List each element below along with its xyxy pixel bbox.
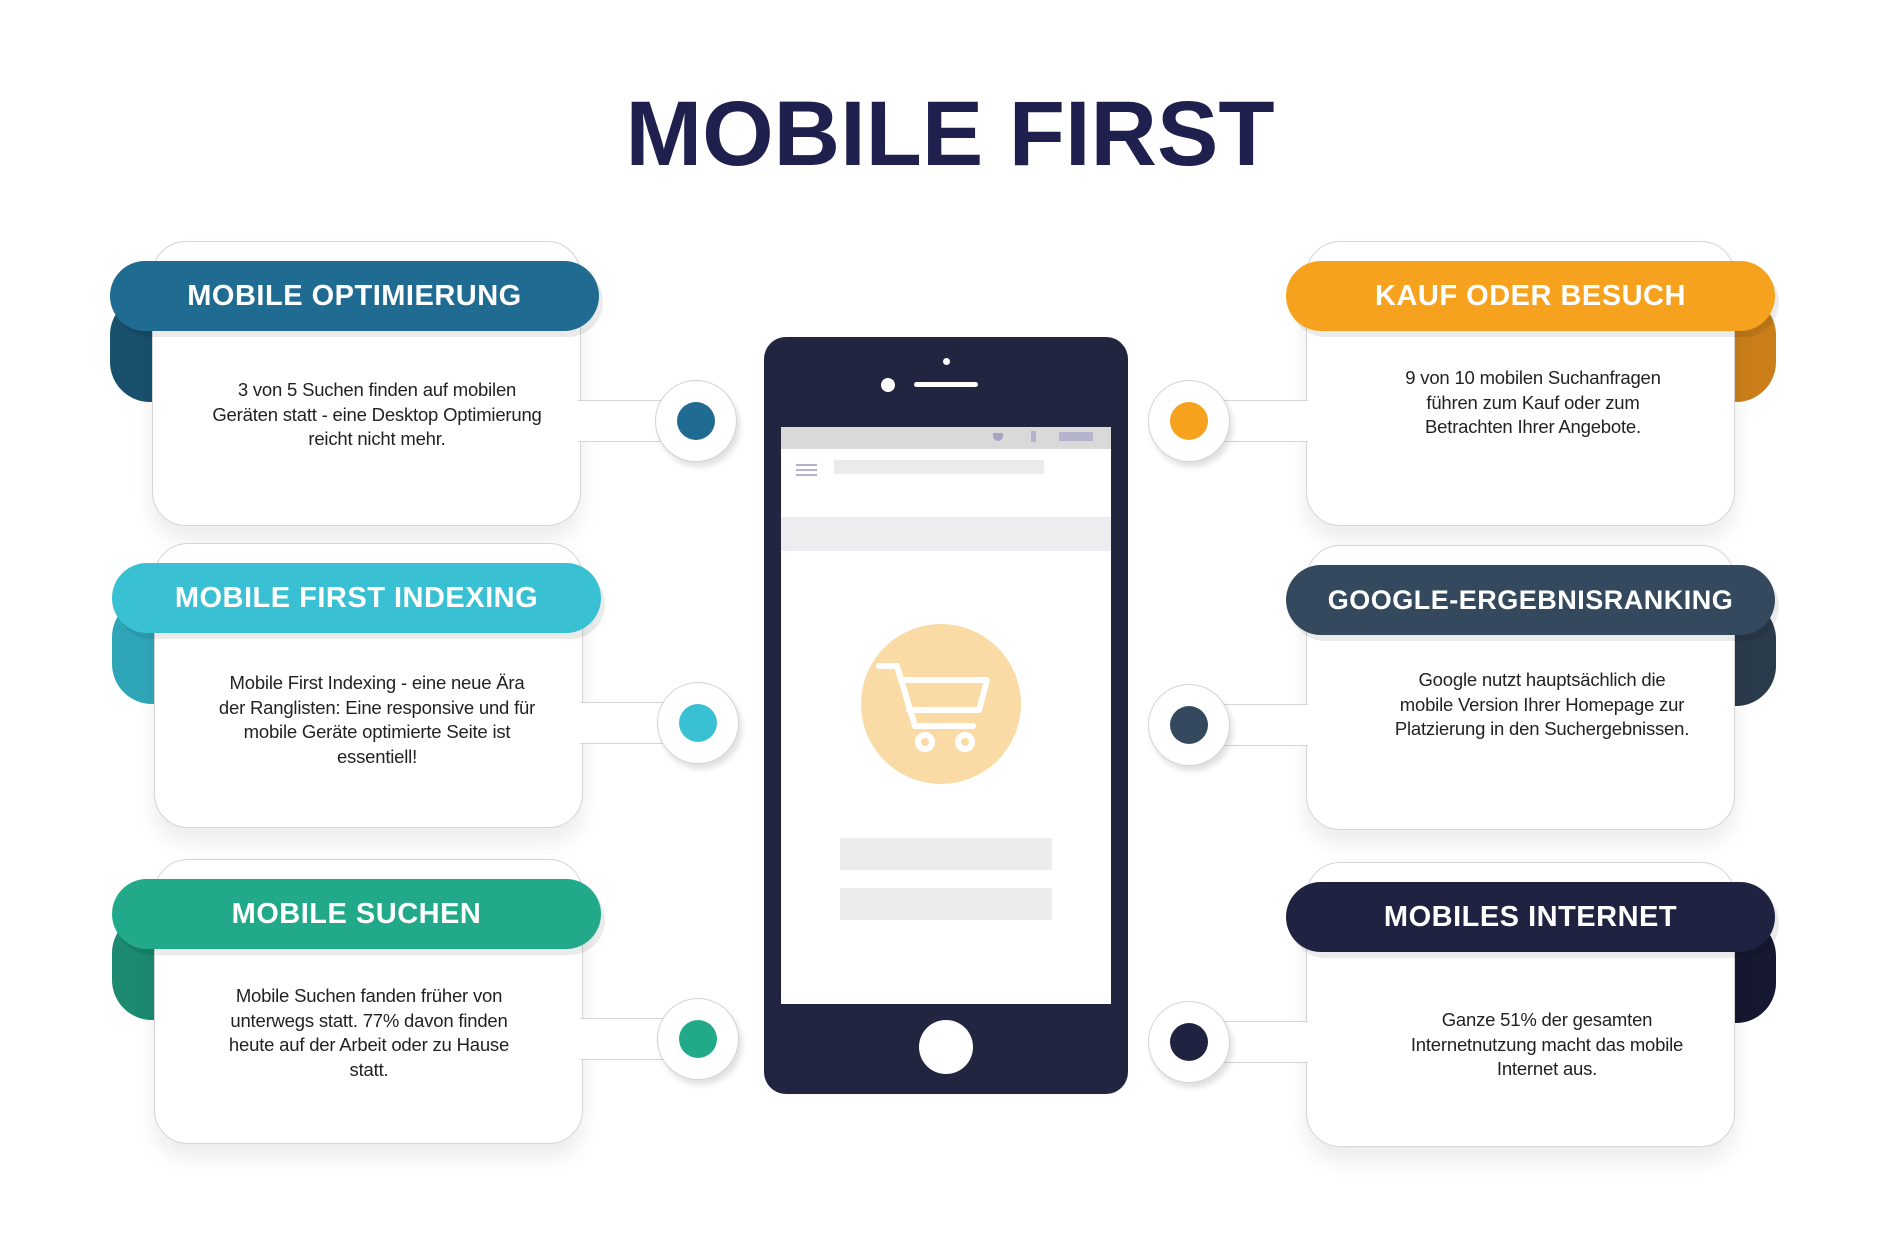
text: mobile optimierung: reicht nicht mehr. — [308, 428, 446, 449]
text: mobile suchen: unterwegs statt. 77% davon finden — [230, 1010, 508, 1030]
home button — [919, 1020, 973, 1074]
heading: google-ergebnisranking — [1286, 565, 1775, 635]
text: kauf oder besuch: 9 von 10 mobilen Suchanfragen — [1405, 367, 1661, 388]
text: mobile first indexing: mobile Geräte optimierte Seite ist — [244, 721, 510, 742]
text: mobile suchen: statt. — [350, 1058, 388, 1080]
phone — [764, 337, 1128, 1094]
heading: kauf oder besuch — [1286, 261, 1775, 331]
panel: mobile optimierung — [110, 241, 742, 542]
heading: mobile optimierung — [110, 261, 599, 331]
text: mobile first indexing: Mobile First Indexing - eine neue Ära — [230, 672, 524, 693]
text: google-ergebnisranking: Platzierung in den Suchergebnissen. — [1395, 718, 1689, 739]
text: mobile optimierung: 3 von 5 Suchen finden auf mobilen — [238, 379, 516, 400]
text: mobile optimierung: Geräten statt - eine Desktop Optimierung — [212, 404, 542, 424]
panel: mobile suchen — [112, 859, 744, 1160]
text: mobile first indexing: essentiell! — [337, 746, 417, 766]
heading: mobile suchen: MOBILE SUCHEN — [232, 898, 481, 930]
text: mobiles internet — [1411, 1009, 1683, 1079]
heading: mobiles internet — [1286, 882, 1775, 952]
heading: mobile first indexing — [112, 563, 601, 633]
heading: kauf oder besuch: KAUF ODER BESUCH — [1375, 280, 1686, 312]
text: mobile first indexing — [219, 672, 535, 766]
text: kauf oder besuch — [1405, 367, 1661, 437]
icon: shopping cart — [861, 624, 1021, 784]
text: google-ergebnisranking: Google nutzt hauptsächlich die — [1418, 669, 1666, 690]
text: kauf oder besuch: Betrachten Ihrer Angebote. — [1425, 416, 1641, 437]
title: MOBILE FIRST — [625, 83, 1275, 185]
text: google-ergebnisranking: mobile Version Ihrer Homepage zur — [1400, 694, 1684, 714]
text: mobile optimierung — [212, 379, 542, 449]
text: mobile first indexing: der Ranglisten: Eine responsive und für — [219, 696, 535, 718]
heading: mobiles internet: MOBILES INTERNET — [1384, 900, 1677, 932]
panel: google-ergebnisranking — [1148, 545, 1779, 846]
text: mobiles internet: Internet aus. — [1497, 1058, 1597, 1079]
text: kauf oder besuch: führen zum Kauf oder zum — [1426, 392, 1640, 412]
text: mobile suchen: heute auf der Arbeit oder zu Hause — [229, 1034, 509, 1055]
text: mobiles internet: Ganze 51% der gesamten — [1442, 1009, 1652, 1030]
text: mobiles internet: Internetnutzung macht das mobile — [1411, 1034, 1683, 1054]
text: mobile suchen — [229, 985, 509, 1080]
panel: kauf oder besuch — [1148, 241, 1779, 542]
panel: mobile first indexing — [112, 543, 744, 844]
panel: mobiles internet — [1148, 862, 1779, 1162]
text: google-ergebnisranking — [1395, 669, 1689, 739]
heading: google-ergebnisranking: GOOGLE-ERGEBNISRANKING — [1328, 584, 1733, 614]
heading: mobile first indexing: MOBILE FIRST INDEXING — [175, 582, 538, 614]
text: mobile suchen: Mobile Suchen fanden früher von — [236, 985, 502, 1006]
heading: mobile optimierung: MOBILE OPTIMIERUNG — [187, 280, 522, 312]
phone screen — [781, 427, 1111, 1004]
heading: mobile suchen — [112, 879, 601, 949]
